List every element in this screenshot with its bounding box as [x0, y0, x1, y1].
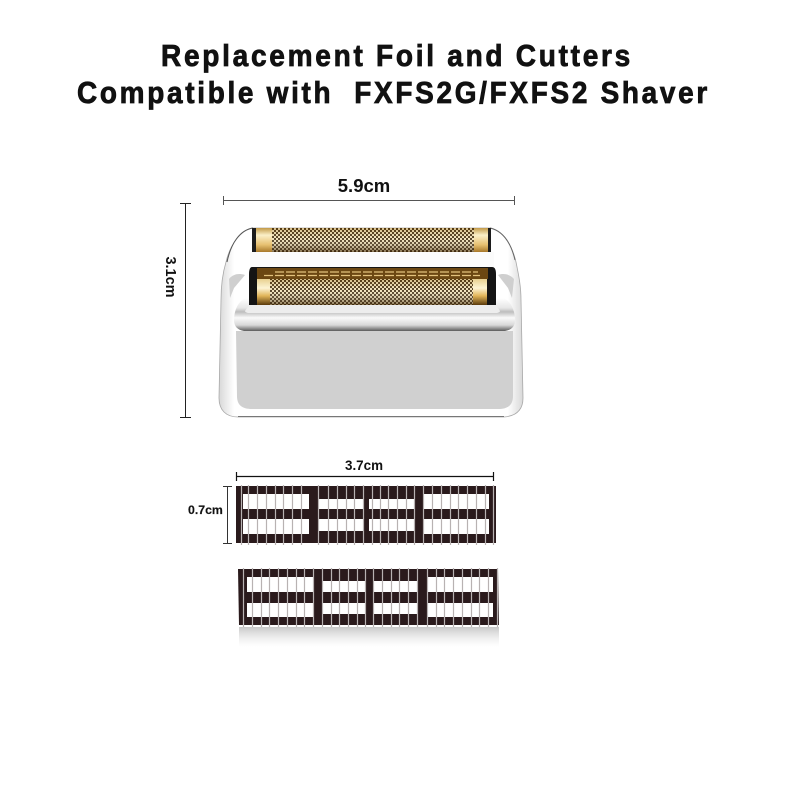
dimension: cutter height 0.7cm: 0.7cm	[188, 503, 223, 517]
title: Replacement Foil and Cutters	[161, 38, 633, 73]
right shoulder notch	[498, 274, 514, 298]
cutter 1	[236, 485, 496, 545]
cutter 2	[238, 568, 499, 647]
cutter 2 reflection	[239, 627, 499, 647]
dimension: foil width 5.9cm	[224, 175, 514, 205]
dimension: foil height 3.1cm	[162, 204, 191, 418]
cutter 2 frame	[238, 569, 499, 625]
front panel	[236, 331, 513, 409]
white bridge	[250, 252, 494, 267]
cutter 2 windows	[247, 577, 493, 617]
front panel rim	[234, 298, 515, 331]
cutter 1 windows	[243, 494, 489, 534]
dimension: cutter width 3.7cm: 3.7cm	[345, 458, 383, 473]
title: Compatible with FXFS2G/FXFS2 Shaver	[77, 75, 710, 110]
head silver body	[219, 228, 523, 417]
foil head	[219, 228, 523, 417]
rear foil	[252, 228, 491, 252]
front foil	[249, 267, 496, 305]
cutter 1 wires	[242, 485, 494, 545]
dimension: foil width 5.9cm: 5.9cm	[338, 175, 390, 196]
cutter 2 wires	[244, 568, 498, 627]
cutter 1 frame	[236, 486, 496, 543]
dimension: cutter height 0.7cm	[188, 486, 232, 544]
left shoulder notch	[229, 274, 245, 298]
left shoulder edge	[227, 228, 253, 262]
title	[77, 38, 710, 110]
front rim top lip	[245, 305, 500, 313]
dimension: cutter width 3.7cm	[236, 458, 494, 481]
right shoulder edge	[490, 228, 515, 260]
dimension: foil height 3.1cm: 3.1cm	[162, 256, 178, 298]
bottom edge	[238, 416, 504, 418]
